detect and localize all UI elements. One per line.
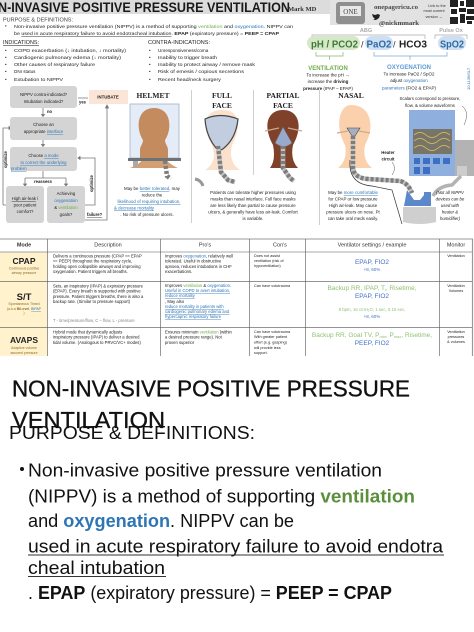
- partial face interface: [265, 91, 302, 181]
- indications: COPD exacerbation (↓ intubation, ↓ mortality): [14, 48, 127, 53]
- humidifier note: humidifier): [440, 216, 461, 221]
- flow labels: failure?: [87, 212, 103, 217]
- flowchart: [3, 86, 128, 223]
- row: S/T: (a.k.a BiLevel, BiPAP: [7, 307, 42, 311]
- air-leak box: poor patient: [14, 202, 37, 208]
- current version link: Link to the: [428, 4, 446, 8]
- mode column fill: [0, 252, 47, 356]
- heater circuit label: [381, 150, 395, 175]
- row: AVAPS: & volumes: [447, 340, 465, 344]
- indications: Cardiogenic pulmonary edema (↓ mortality): [14, 55, 122, 60]
- row: AVAPS: a desired pressure range). Not: [165, 334, 223, 340]
- goals box: goals?: [60, 212, 73, 217]
- table header: Pro's: [199, 242, 211, 248]
- full face interface: is variable.: [242, 216, 264, 221]
- row: CPAP: tolerated. Useful in obstructive: [165, 258, 222, 264]
- row: S/T: Ventilation: [447, 284, 465, 288]
- ventilation note: [303, 66, 353, 91]
- row: AVAPS: , P: [386, 332, 394, 339]
- purpose body text: and oxygenation. NIPPV can be: [28, 511, 294, 531]
- site and social: onepagericu.co: [374, 5, 418, 11]
- nasal interface: for CPAP or low pressure: [328, 196, 378, 202]
- contraindication question box: [10, 86, 77, 108]
- row: CPAP: EPAP, FIO2: [355, 259, 389, 266]
- ventilation note: increase the driving: [308, 79, 349, 84]
- purpose body text: cheal intubation: [28, 558, 165, 578]
- indications: INDICATIONS:: [3, 40, 39, 46]
- oxygenation note: adjust oxygenation: [390, 78, 428, 83]
- row: S/T: reduce mortality: [165, 293, 196, 298]
- row: S/T: cardiogenic pulmonary edema and: [165, 309, 230, 314]
- row: CPAP: Delivers a continuous pressure (CPAP ≈≈ EPAP: [53, 254, 142, 258]
- table header: Mode: [17, 242, 31, 248]
- row: S/T: i: [385, 287, 386, 292]
- flow arrows: [3, 98, 108, 220]
- helmet interface: May be better tolerated, may: [124, 186, 181, 191]
- table header: Ventilator settings / example: [338, 242, 406, 248]
- ONE logo: ONE: [343, 8, 358, 16]
- contraindication question box: NIPPV contra-indicated?: [20, 92, 68, 97]
- row: AVAPS: effort (e.g. gasping): [254, 340, 288, 344]
- scalars note: flow, & volume waveforms: [405, 103, 455, 108]
- row: AVAPS: tidal volume. (Analogous to PRVC/VC+ modes): [53, 340, 141, 345]
- nasal interface: pressure ulcers on nose. Pt: [326, 210, 381, 214]
- ABG panel: HCO3: [399, 40, 427, 50]
- indications: •: [5, 62, 7, 67]
- row: CPAP: oxygenation. Patient triggers all breaths.: [53, 269, 128, 274]
- heater circuit label: Heater: [381, 150, 395, 155]
- row: S/T: [7, 283, 465, 323]
- indications: •: [5, 55, 7, 60]
- purpose body text: . EPAP (expiratory pressure) = PEEP = CPAP: [28, 583, 392, 603]
- contra-indications: •: [149, 55, 151, 60]
- ventilation note: pressure (IPAP – EPAP): [303, 86, 353, 91]
- contraindication question box: Intubation indicated?: [24, 99, 64, 104]
- indications: [3, 40, 127, 82]
- oxygenation note: To increase PaO2 / SpO2: [383, 72, 435, 76]
- interface box: appropriate interface: [24, 129, 64, 134]
- table header: Monitor: [447, 242, 465, 248]
- ABG panel: pH / PCO2: [311, 40, 358, 50]
- row: CPAP: [9, 254, 465, 275]
- full face interface: Patients can tolerate higher pressures using: [210, 190, 296, 195]
- row: S/T: , May also: [165, 299, 185, 304]
- row: AVAPS: inspiratory pressure (IPAP) to deliver a desired: [53, 334, 140, 340]
- contra-indications: •: [149, 62, 151, 67]
- helmet interface: likelihood of requiring intubation,: [118, 199, 180, 204]
- goals box: & ventilation: [54, 205, 78, 210]
- row: S/T: Improves ventilation & oxygenation.: [165, 283, 231, 288]
- row: AVAPS: , Risetime,: [401, 332, 432, 339]
- modes table: [0, 239, 473, 356]
- full face interface: [195, 91, 299, 221]
- row: S/T: Spontaneous Timed: [8, 302, 40, 306]
- purpose body text: (NIPPV) is a method of supporting ventilation: [28, 486, 415, 506]
- helmet interface: HELMET: [137, 91, 169, 100]
- row: CPAP: exacerbations.: [165, 269, 192, 274]
- ONE logo: [336, 2, 365, 24]
- contra-indications: Risk of emesis / copious secretions: [158, 69, 245, 74]
- mode box: [10, 147, 77, 171]
- row: S/T: hypercapnic respiratory failure: [165, 314, 222, 319]
- contra-indications: Recent head/neck surgery: [158, 77, 222, 82]
- ABG panel: SpO2: [440, 40, 464, 50]
- row: AVAPS: pressures: [448, 335, 464, 339]
- scalars note: Scalars correspond to pressure,: [400, 96, 460, 101]
- row: AVAPS: With greater patient: [254, 335, 288, 339]
- nasal interface: High air-leak. May cause: [329, 203, 378, 208]
- air-leak box: comfort?: [17, 209, 34, 214]
- table header: Con's: [273, 242, 287, 248]
- goals box: [47, 186, 85, 223]
- full face interface: are less likely than partial to cause pressure: [210, 203, 296, 208]
- ABG panel: /: [361, 40, 364, 50]
- row: S/T: T - time/pressure/flow, C – flow, L - pressure: [53, 318, 135, 323]
- row: S/T: reduce mortality in patients with: [165, 304, 224, 309]
- helmet interface: reduce the: [142, 192, 163, 198]
- ABG panel: Pulse Ox: [439, 28, 464, 34]
- row: S/T: Backup RR, IPAP, T: [327, 285, 385, 292]
- purpose body text: [20, 460, 444, 603]
- interface box: [10, 117, 77, 140]
- full face interface: masks than nasal interface. Full face masks: [210, 196, 296, 202]
- purpose and definitions: •: [5, 24, 7, 28]
- full face interface: FULL: [212, 91, 232, 100]
- helmet interface: [114, 91, 181, 217]
- purpose and definitions: PURPOSE & DEFINITIONS:: [3, 18, 73, 24]
- site and social: [372, 5, 420, 27]
- row: AVAPS: Adaptive volume: [11, 346, 37, 350]
- row: S/T: Can have volutrauma: [254, 284, 291, 288]
- purpose and definitions: Non-invasive positive pressure ventilation (NIPPV) is a method of supporting ventilation and oxygenation . NIPPV can: [14, 24, 294, 29]
- current version link: version →: [425, 15, 443, 19]
- contra-indications: CONTRA-INDICATIONS:: [148, 40, 210, 46]
- heater circuit label: circuit: [382, 156, 395, 162]
- row: AVAPS: max: [394, 334, 401, 339]
- nasal interface: can take oral meds easily.: [328, 216, 378, 221]
- row: CPAP: hypoventilation): [254, 264, 281, 268]
- header bar: [0, 0, 474, 27]
- row: AVAPS: assured pressure: [10, 351, 38, 355]
- row: AVAPS: proven superior: [165, 340, 195, 345]
- ABG panel: ABG: [360, 28, 372, 34]
- row: S/T: ): [23, 311, 25, 315]
- row: CPAP: ventilation (risk of: [254, 259, 284, 263]
- ABG panel: PaO2: [366, 40, 392, 50]
- indications: •: [5, 69, 7, 74]
- flow labels: optimize: [89, 174, 94, 192]
- purpose and definitions: be used in acute respiratory failure to avoid endotracheal intubation . EPAP (expiratory pressure) = PEEP = CPAP: [14, 31, 279, 36]
- row: AVAPS: Ensures minimum ventilation (within: [165, 330, 232, 334]
- row: S/T: S/T: [17, 292, 32, 303]
- row: S/T: +8, 60%: [364, 314, 380, 319]
- row: AVAPS: [10, 330, 465, 355]
- row: CPAP: ≈≈ PEEP) throughout the respiratory cycle,: [53, 258, 132, 264]
- row: S/T: pressure. Patient triggers breaths, there is also a: [53, 294, 144, 299]
- mode box: problem: [11, 166, 27, 171]
- ABG panel: [303, 28, 467, 91]
- table header: Description: [94, 242, 122, 248]
- interface box: Choose an: [33, 122, 54, 127]
- oxygenation note: [382, 65, 436, 90]
- row: AVAPS: Can have volutrauma: [254, 330, 291, 334]
- row: S/T: Sets, an inspiratory (IPAP) & expiratory pressure: [53, 284, 144, 288]
- partial face interface: PARTIAL: [267, 91, 299, 100]
- contra-indications: •: [149, 69, 151, 74]
- humidifier note: heater &: [442, 210, 458, 214]
- indications: DNI status: [14, 69, 36, 74]
- air-leak box: High air-leak /: [12, 196, 39, 201]
- contra-indications: •: [149, 77, 151, 82]
- flow labels: yes: [79, 100, 87, 104]
- row: CPAP: CPAP: [12, 256, 36, 266]
- large title: [12, 376, 410, 433]
- row: S/T: Useful in COPD to avert intubation,: [165, 288, 230, 293]
- indications: •: [5, 77, 7, 82]
- oxygenation note: OXYGENATION: [387, 65, 431, 71]
- row: CPAP: airway pressure: [12, 271, 36, 275]
- row: AVAPS: Ventilation: [447, 330, 465, 334]
- ventilator with heater circuit: [350, 96, 474, 224]
- row: S/T: , Risetime,: [386, 285, 417, 292]
- site and social: @nickmmark: [379, 21, 420, 27]
- row: CPAP: +8, 60%: [364, 267, 380, 272]
- mode box: Choose a mode: [28, 153, 59, 158]
- purpose body text: Non-invasive positive pressure ventilation: [28, 460, 382, 480]
- contra-indications: •: [149, 48, 151, 53]
- flow labels: reassess: [34, 179, 53, 184]
- row: AVAPS: support.: [254, 351, 268, 355]
- purpose heading: PURPOSE & DEFINITIONS:: [9, 423, 255, 443]
- flow labels: [3, 100, 103, 217]
- indications: Other causes of respiratory failure: [14, 62, 96, 67]
- scalars note: [400, 96, 467, 125]
- large title: NON-INVASIVE POSITIVE PRESSURE: [12, 376, 410, 402]
- row: CPAP: holding open collapsible airways and improving: [53, 264, 141, 269]
- author: Mark MD: [288, 6, 317, 13]
- full face interface: FACE: [212, 101, 232, 110]
- contra-indications: Inability to trigger breath: [158, 55, 218, 60]
- ABG panel: /: [393, 40, 396, 50]
- nasal interface: May be more comfortable: [328, 190, 378, 195]
- nasal interface: NASAL: [338, 91, 364, 100]
- row: CPAP: apnoea, reduces intubations in CHF: [165, 264, 232, 269]
- row: AVAPS: min: [379, 334, 386, 339]
- row: AVAPS: PEEP, FIO2: [355, 340, 390, 347]
- oxygenation note: parameters (FiO2 & EPAP): [382, 86, 436, 90]
- citation: 10.1136/SLT: [466, 67, 471, 90]
- indications: •: [5, 48, 7, 53]
- row: AVAPS: Hybrid mode that dynamically adjusts: [53, 330, 122, 334]
- current version link: [423, 4, 446, 19]
- row: S/T: backup rate. (Similar to pressure support): [53, 299, 131, 304]
- table header: [0, 239, 473, 252]
- contra-indications: Inability to protect airway / remove mask: [158, 62, 256, 67]
- goals box: oxygenation: [54, 198, 78, 203]
- large title: VENTILATION: [12, 407, 165, 433]
- row: AVAPS: AVAPS: [10, 335, 38, 345]
- row: CPAP: Continuous positive: [9, 266, 39, 270]
- row: AVAPS: Backup RR, Goal TV, P: [312, 332, 379, 339]
- intubate box: INTUBATE: [97, 94, 119, 100]
- row: S/T: 8 bpm, 16 cmH₂O, 1 sec, 0.15 sec,: [339, 307, 405, 312]
- helmet interface: & decrease mortality: [114, 206, 155, 210]
- goals box: Achieving: [57, 191, 76, 196]
- ventilation note: To increase the pH →: [306, 72, 350, 78]
- contra-indications: Unresponsiveness/coma: [158, 48, 209, 53]
- nasal interface: [326, 91, 381, 221]
- helmet interface: . No risk of pressure ulcers.: [120, 212, 174, 217]
- partial face interface: FACE: [273, 101, 293, 110]
- row: CPAP: Ventilation: [447, 254, 465, 258]
- row: AVAPS: will provide less: [254, 346, 281, 350]
- flow labels: optimize: [3, 150, 8, 168]
- purpose and definitions: [3, 18, 294, 36]
- humidifier note: devices can be: [436, 196, 465, 202]
- humidifier note: (Not all NIPPV: [436, 190, 465, 195]
- humidifier note: used with: [441, 203, 460, 208]
- row: S/T: Volumes: [449, 289, 463, 293]
- flow labels: no: [47, 109, 53, 114]
- humidifier note: [436, 190, 465, 221]
- ventilation note: VENTILATION: [308, 66, 348, 72]
- purpose body text: used in acute respiratory failure to avoid endotra: [28, 536, 444, 556]
- full face interface: ulcers, & generally have less air-leak. Comfort: [208, 210, 299, 214]
- mode box: to correct the underlying: [20, 160, 67, 165]
- indications: Extubation to NIPPV: [14, 77, 64, 82]
- row: CPAP: Improves oxygenation, relatively well: [165, 254, 233, 258]
- air-leak box: [6, 186, 44, 223]
- QR code: [450, 0, 474, 24]
- row: S/T: (EPAP). Every breath is supported with positive: [53, 288, 141, 294]
- row: CPAP: Does not assist: [254, 254, 281, 258]
- current version link: most current: [423, 9, 445, 13]
- contra-indications: [148, 40, 256, 82]
- row: S/T: EPAP, FIO2: [355, 293, 389, 300]
